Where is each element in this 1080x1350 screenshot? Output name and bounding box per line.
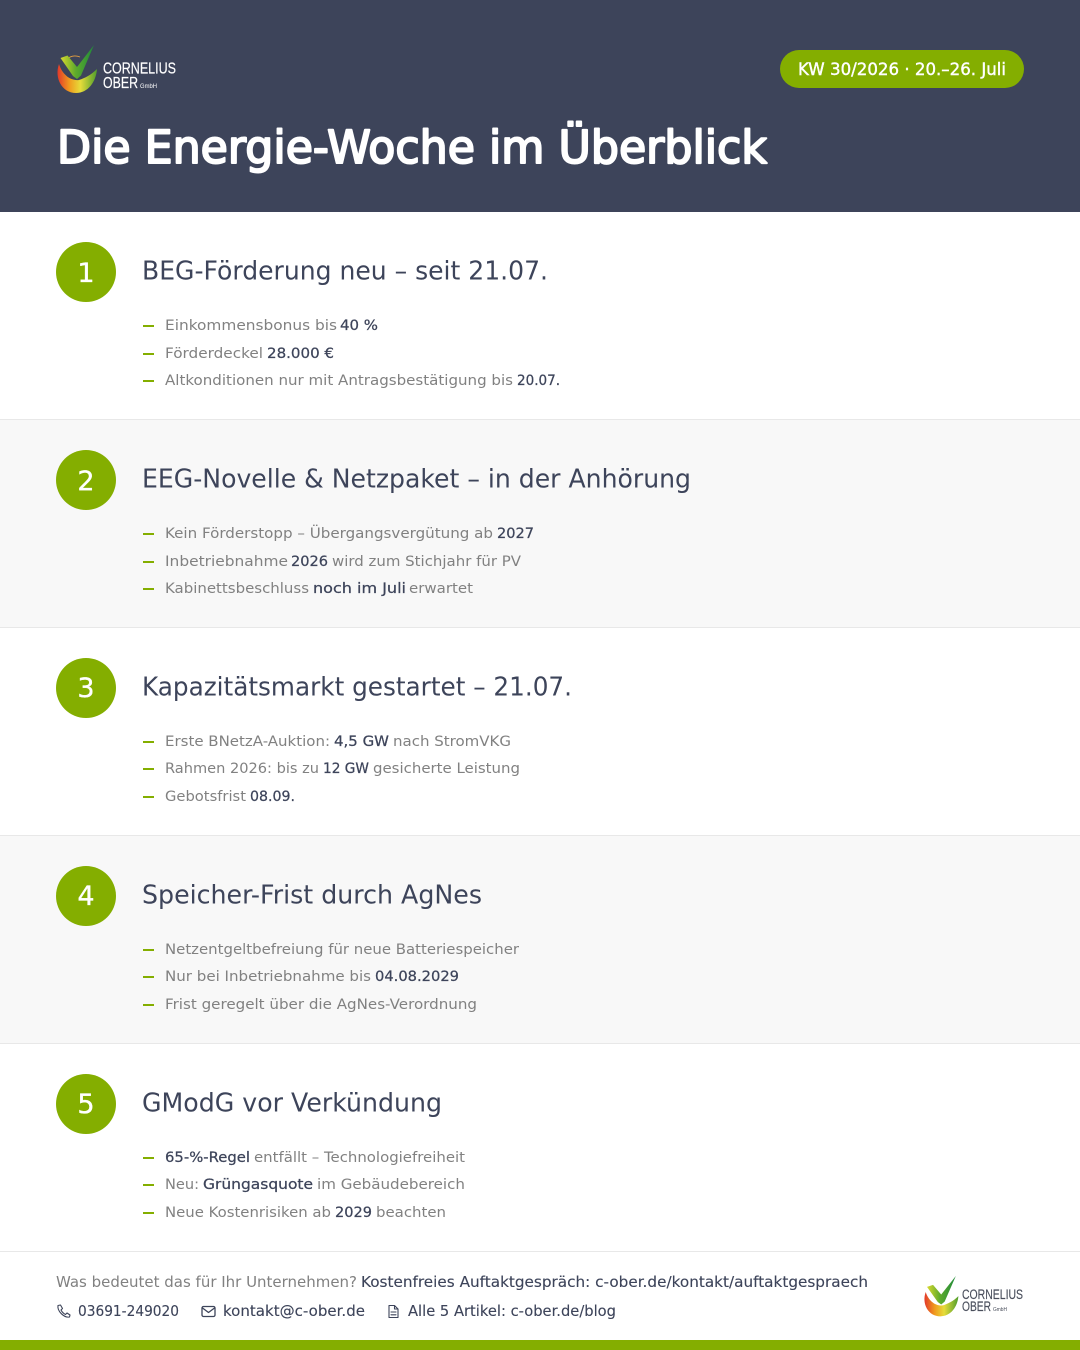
bullet list 3: Erste BNetzA-Auktion: — [165, 734, 330, 750]
number 1 — [56, 242, 116, 302]
heading 4: Speicher-Frist durch AgNes — [142, 880, 482, 910]
contact: email: kontakt@c-ober.de — [223, 1302, 365, 1320]
bullet list 5: entfällt – Technologiefreiheit — [254, 1150, 465, 1166]
bullet list 1: 28.000 € — [267, 346, 334, 362]
bullet list 2: 2027 — [497, 526, 534, 542]
bullet list 3: 12 GW — [323, 761, 369, 777]
bullet list 1: 40 % — [340, 318, 378, 334]
bullet list 3: nach StromVKG — [393, 734, 511, 750]
footer logo — [924, 1276, 1023, 1316]
footer logo: OBER — [962, 1299, 991, 1314]
contact: blog: Alle 5 Artikel: c-ober.de/blog — [408, 1302, 616, 1320]
bullet list 2: noch im Juli — [313, 581, 406, 597]
bullet list 3: Rahmen 2026: bis zu — [165, 761, 319, 777]
footer call to action — [56, 1273, 868, 1291]
bullet list 4: Nur bei Inbetriebnahme bis — [165, 969, 371, 985]
bullet list 5: beachten — [376, 1205, 446, 1221]
bullet list 4 — [143, 942, 519, 1013]
number 2 — [56, 450, 116, 510]
number 2: 2 — [77, 466, 95, 497]
contact: phone: 03691-249020 — [78, 1302, 179, 1320]
title: Die Energie-Woche im Überblick — [57, 121, 767, 174]
bottom accent bar — [0, 1340, 1080, 1350]
number 1: 1 — [77, 258, 95, 289]
bullet list 4: Frist geregelt über die AgNes-Verordnung — [165, 997, 477, 1013]
bullet list 2: Kabinettsbeschluss — [165, 581, 309, 597]
number 4 — [56, 866, 116, 926]
bullet list 3: Gebotsfrist — [165, 789, 246, 805]
bullet list 3 — [143, 734, 520, 805]
footer call to action: Kostenfreies Auftaktgespräch: c-ober.de/kontakt/auftaktgespraech — [361, 1273, 868, 1291]
bullet list 2: wird zum Stichjahr für PV — [332, 554, 521, 570]
bullet list 3: 08.09. — [250, 789, 295, 805]
footer logo: GmbH — [993, 1307, 1007, 1313]
bullet list 2: 2026 — [291, 554, 328, 570]
bullet list 4: 04.08.2029 — [375, 969, 459, 985]
heading 5: GModG vor Verkündung — [142, 1088, 442, 1118]
heading 3: Kapazitätsmarkt gestartet – 21.07. — [142, 672, 572, 702]
number 5: 5 — [77, 1089, 95, 1120]
bullet list 1: Förderdeckel — [165, 346, 263, 362]
heading 2: EEG-Novelle & Netzpaket – in der Anhörung — [142, 464, 691, 494]
panel: section 3 — [0, 628, 1080, 836]
footer logo: CORNELIUS — [962, 1287, 1023, 1302]
bullet list 2: erwartet — [409, 581, 473, 597]
bullet list 5: 2029 — [335, 1205, 372, 1221]
logo: Cornelius Ober — [58, 45, 176, 93]
bullet list 4: Netzentgeltbefreiung für neue Batteriespeicher — [165, 942, 519, 958]
bullet list 5: 65-%-Regel — [165, 1150, 250, 1166]
bullet list 3: 4,5 GW — [334, 734, 389, 750]
number 5 — [56, 1074, 116, 1134]
bullet list 1: Altkonditionen nur mit Antragsbestätigung bis — [165, 373, 513, 389]
bullet list 2: Kein Förderstopp – Übergangsvergütung ab — [165, 524, 493, 542]
panel: section 5 — [0, 1044, 1080, 1252]
number 3: 3 — [77, 673, 95, 704]
bullet list 5 — [143, 1150, 465, 1221]
logo: Cornelius Ober: OBER — [103, 75, 138, 92]
bullet list 2: Inbetriebnahme — [165, 554, 288, 570]
footer — [0, 1252, 1080, 1340]
bullet list 5: Neu: — [165, 1177, 199, 1193]
bullet list 1: 20.07. — [517, 373, 560, 389]
panel: section 1 — [0, 212, 1080, 420]
date badge: KW 30/2026 · 20.–26. Juli — [798, 60, 1006, 80]
panel: section 4 — [0, 836, 1080, 1044]
bullet list 5: Grüngasquote — [203, 1177, 313, 1193]
header — [0, 0, 1080, 212]
bullet list 1 — [143, 318, 560, 389]
bullet list 3: gesicherte Leistung — [373, 761, 520, 777]
logo: Cornelius Ober: GmbH — [140, 84, 157, 90]
number 3 — [56, 658, 116, 718]
panel: section 2 — [0, 420, 1080, 628]
bullet list 2 — [143, 524, 534, 597]
footer call to action: Was bedeutet das für Ihr Unternehmen? — [56, 1273, 357, 1291]
logo: Cornelius Ober: CORNELIUS — [103, 60, 176, 78]
bullet list 5: im Gebäudebereich — [317, 1177, 465, 1193]
date badge — [780, 50, 1024, 88]
number 4: 4 — [77, 881, 95, 912]
heading 1: BEG-Förderung neu – seit 21.07. — [142, 256, 548, 286]
bullet list 1: Einkommensbonus bis — [165, 318, 337, 334]
bullet list 5: Neue Kostenrisiken ab — [165, 1205, 331, 1221]
